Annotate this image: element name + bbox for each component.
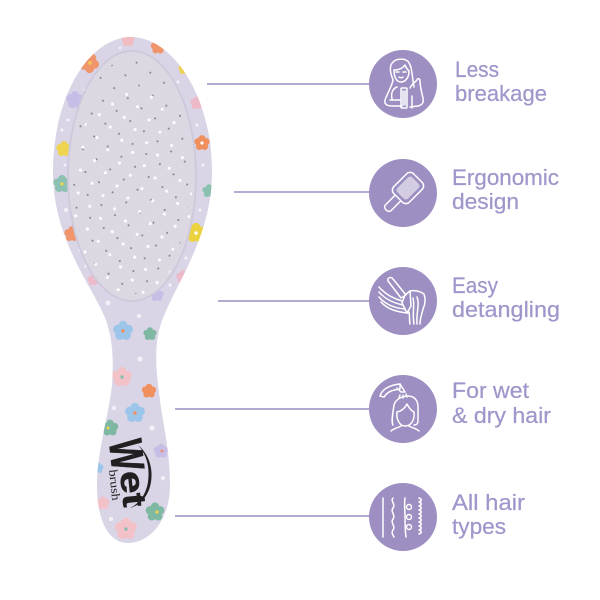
icon: paddle brush	[369, 159, 437, 227]
logo: Wet brush: et	[113, 469, 154, 509]
text: Ergonomic design: Ergonomic	[452, 165, 559, 190]
logo: Wet brush: W	[99, 437, 155, 473]
text: Easy detangling: detangling	[452, 297, 560, 322]
icon: comb through hair	[369, 267, 437, 335]
text: Easy detangling: Easy	[452, 273, 499, 298]
text: All hair types: All hair	[452, 490, 526, 515]
logo: Wet brush	[99, 437, 155, 509]
icon: hair textures	[369, 483, 437, 551]
text: All hair types	[452, 490, 526, 539]
flower pattern	[53, 33, 216, 539]
benefit: easy detangling	[369, 267, 560, 335]
icon: shower over head	[369, 375, 437, 443]
benefit: less breakage	[369, 50, 547, 118]
text: Less breakage	[455, 57, 547, 106]
text: For wet & dry hair: & dry hair	[452, 403, 552, 428]
brush body	[53, 37, 212, 543]
text: For wet & dry hair	[452, 378, 552, 428]
text: Ergonomic design: design	[452, 189, 519, 214]
logo: Wet brush: brush	[106, 469, 123, 501]
white polka dots	[60, 46, 205, 521]
text: Less breakage: breakage	[455, 81, 547, 106]
text: Easy detangling	[452, 273, 560, 322]
bristle pad	[67, 50, 197, 302]
benefit: all hair types	[369, 483, 526, 551]
text: Less breakage: Less	[455, 57, 499, 82]
text: Ergonomic design	[452, 165, 559, 214]
icon: woman brushing hair	[369, 50, 437, 118]
benefit: for wet and dry hair	[369, 375, 552, 443]
text: All hair types: types	[452, 514, 506, 539]
benefit: ergonomic design	[369, 159, 559, 227]
connector lines	[175, 84, 372, 516]
hairbrush	[53, 33, 216, 543]
text: For wet & dry hair: For wet	[452, 378, 530, 403]
